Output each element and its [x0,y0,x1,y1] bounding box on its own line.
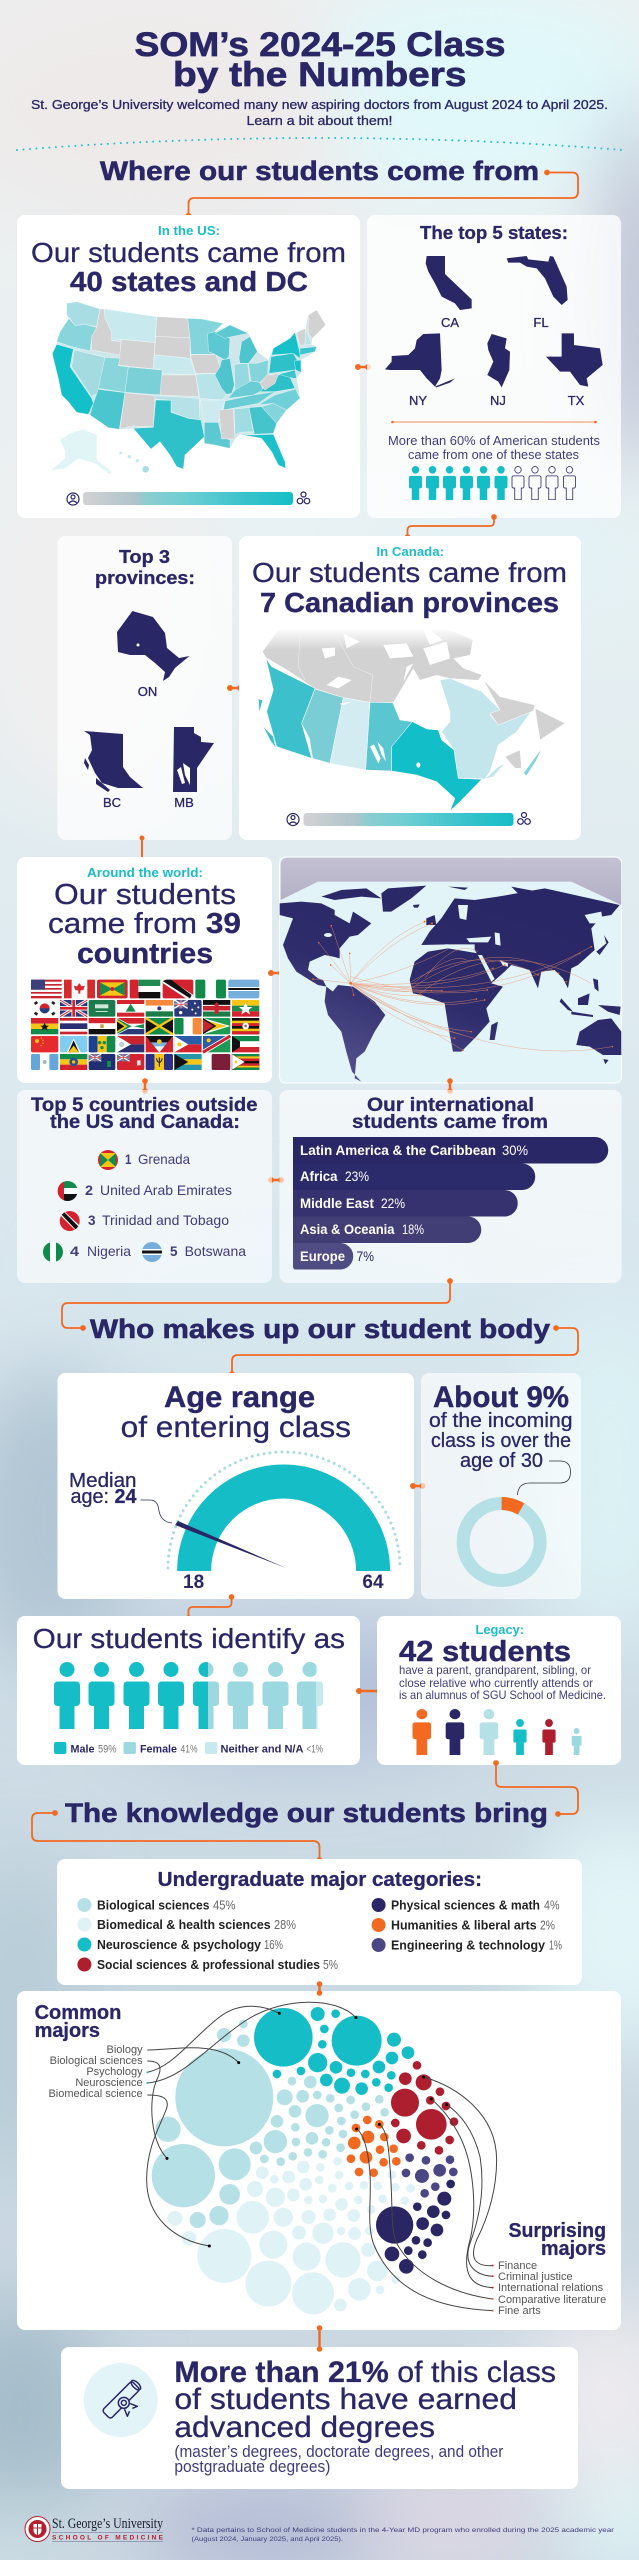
legend: categories: 45% [213,1898,236,1912]
connector [186,1595,234,1620]
connector [410,1484,425,1488]
labels: common majors: Biological sciences [50,2055,143,2067]
connector [32,1811,322,1862]
logo: St. George's University: SCHOOL OF MEDICINE [52,2534,164,2542]
legend: categories: Biomedical & health sciences [97,1917,271,1932]
logo: St. George's University [25,2516,164,2542]
pictogram [54,1662,323,1730]
legend: Female [140,1744,177,1756]
legend: Male [70,1744,94,1756]
title: by the Numbers [173,56,466,94]
text: over age 30: age of 30 [460,1450,543,1472]
gauge labels: 18 [183,1572,204,1593]
heading: age range: Age range [164,1381,315,1414]
text: 60 percent: came from one of these states [408,447,579,462]
text: legacy description [399,1663,606,1702]
heading: common majors: majors [35,2020,100,2042]
panel: top 3 provinces [58,536,232,840]
connector: provinces to world [140,836,144,861]
province labels: BC [103,795,121,810]
heading: international students [352,1095,548,1133]
rank: UAE: United Arab Emirates [100,1182,232,1198]
heading: the knowledge our students bring: The knowledge our students bring [65,1798,548,1828]
text: over age 30 [429,1410,572,1472]
Canada choropleth map [258,630,565,811]
heading: age range [121,1381,351,1444]
migration arcs [313,922,612,1051]
panel: age range [58,1373,414,1599]
headline: 40 states: Our students came from [31,237,346,268]
legend: Neither and N/A [220,1744,304,1756]
panel: top 5 countries [17,1090,272,1283]
panel: advanced degrees [61,2347,578,2489]
heading: top 5 countries: the US and Canada: [50,1112,240,1133]
panel: undergraduate major categories [57,1859,582,1985]
legend scale [287,812,530,826]
rank: Grenada: Grenada [138,1151,190,1167]
packed bubbles [146,2002,497,2314]
text: legacy description: have a parent, grandparent, sibling, or [399,1663,591,1677]
panel: around the world [17,857,272,1083]
text: over age 30: class is over the [431,1430,571,1452]
label: legacy: Legacy: [476,1622,524,1637]
panel: Canada map [239,536,581,840]
title: SOM’s 2024-25 Class [134,26,506,64]
heading: surprising majors: Surprising [508,2220,606,2242]
bubbles: engineering [402,2153,458,2198]
headline: 7 provinces [252,557,567,618]
connector [317,1982,322,1995]
legend: categories: Engineering & technology [391,1938,546,1952]
state labels: NJ [490,393,506,408]
heading: international students: Our international [367,1095,534,1116]
logo: St. George's University: St. George’s University [52,2516,163,2532]
labels: common majors [48,2044,143,2100]
bar chart: Latin America & the Caribbean [300,1142,496,1158]
connector [268,970,284,976]
heading: common majors [35,2002,121,2042]
text: degree types: (master’s degrees, doctorate degrees, and other [174,2442,504,2461]
text: legacy description: close relative who currently attends or [399,1676,593,1690]
legend: categories: Neuroscience & psychology [97,1937,262,1952]
subtitle: St. George’s University welcomed many new aspiring doctors from August 2024 to April 2025. [31,97,608,112]
bar chart: 23% [345,1168,369,1184]
label: in Canada: In Canada: [376,544,444,559]
icon: diploma [84,2363,158,2437]
headline: 21 percent: advanced degrees [174,2411,435,2444]
headline: 7 provinces: 7 Canadian provinces [260,587,559,618]
labels: surprising majors: Finance [498,2260,537,2272]
connector [186,170,578,218]
bubbles: social sciences [391,2061,458,2155]
bar chart: Middle East [300,1195,374,1211]
rank: Nigeria: 4 [70,1243,79,1259]
continents [280,886,621,1082]
panel: about 9 percent [421,1373,581,1599]
label: in the US: In the US: [158,223,220,238]
connector [494,1761,578,1816]
heading: who makes up our student body: Who makes up our student body [90,1314,550,1344]
legend: categories: 1% [549,1938,562,1952]
legend: categories: 4% [544,1898,560,1912]
heading: surprising majors: majors [541,2238,606,2260]
legend: categories: Social sciences & professional studies [97,1957,320,1972]
legend: categories: Biological sciences [97,1898,210,1912]
rank: Nigeria [43,1242,131,1262]
legend: 41% [180,1744,198,1756]
headline: 40 states: 40 states and DC [70,266,308,297]
legend: categories: 5% [323,1957,338,1972]
heading: age range: of entering class [121,1411,351,1444]
headline: 39 countries: countries [77,938,213,970]
state labels: FL [533,315,549,330]
connector: US to top states [356,364,370,370]
rank: Trinidad and Tobago [59,1211,229,1231]
connectors between world panels [143,1079,452,1182]
labels: common majors: Psychology [86,2066,143,2078]
heading: surprising majors [508,2220,606,2260]
bar chart: 22% [381,1195,405,1211]
province labels: ON [138,684,157,699]
connector [230,1326,578,1376]
connector [356,1688,382,1694]
bar chart: Europe [300,1248,345,1264]
title [134,26,506,94]
heading: identify as: Our students identify as [33,1623,345,1654]
heading: international students: students came from [352,1112,548,1133]
bubbles: biological sciences [152,2020,389,2228]
state labels: CA [441,315,459,330]
bar chart [293,1137,608,1270]
text: degree types [174,2442,504,2476]
gauge labels [183,1572,384,1593]
bar chart: Asia & Oceania [300,1221,395,1237]
province labels [103,684,194,810]
headline: 21 percent [174,2356,556,2444]
connector [317,2326,322,2351]
leader lines [147,2002,497,2311]
province labels: MB [174,795,194,810]
state labels [409,315,585,408]
rank: Trinidad and Tobago: Trinidad and Tobago [102,1212,229,1228]
rank: UAE: 2 [85,1182,93,1198]
heading: common majors: Common [35,2002,121,2024]
headline: 42 students: 42 students [399,1636,571,1668]
headline: 40 states [31,237,346,297]
labels: common majors: Biology [107,2044,143,2056]
text: 60 percent: More than 60% of American students [388,433,600,448]
family pictogram [412,1709,582,1755]
panel: international students bar chart [280,1090,622,1283]
bar chart: 18% [402,1221,424,1237]
bar chart: 30% [502,1142,528,1158]
legend: categories [77,1898,562,1972]
province silhouettes [78,611,214,792]
legend [54,1742,323,1756]
legend: categories: Humanities & liberal arts [391,1918,537,1932]
callout: median age [69,1470,172,1523]
headline: 21 percent: More than 21% of this class [174,2356,556,2389]
subtitle [31,97,608,128]
gauge chart [168,1452,400,1571]
panel: gender identity [17,1616,360,1765]
heading: top 3 provinces: Top 3 [119,547,170,567]
panel: top 5 states [367,215,621,518]
bubbles: biomedical and health sciences [168,2157,415,2314]
rank: Grenada: 1 [125,1151,132,1167]
bar chart: 7% [356,1248,374,1264]
text: degree types: postgraduate degrees) [174,2457,330,2476]
rank: Botswana: Botswana [185,1243,246,1259]
bubbles: humanities [347,2116,401,2177]
rank: Botswana [142,1242,246,1262]
heading: top 3 provinces: provinces: [95,568,195,588]
label: around the world: Around the world: [87,865,203,880]
headline: 39 countries [48,879,241,970]
text: 60 percent [388,433,600,462]
callout: median age: age: 24 [70,1486,137,1508]
heading: top 3 provinces [95,547,195,588]
state labels: NY [409,393,427,408]
leader line [518,1461,570,1495]
text: over age 30: of the incoming [429,1410,572,1432]
rank: Trinidad and Tobago: 3 [88,1212,96,1228]
heading: top 5 states: The top 5 states: [420,223,568,243]
rank: Botswana: 5 [170,1243,178,1259]
bubbles: physical sciences [376,2180,455,2274]
panel: bubble chart [17,1991,621,2330]
heading: undergraduate categories: Undergraduate major categories: [158,1869,482,1891]
heading: top 5 countries [31,1095,258,1133]
legend: categories: 2% [540,1918,555,1932]
footnote: (August 2024, January 2025, and April 2025). [192,2536,343,2543]
US choropleth map [52,302,326,474]
labels: surprising majors: Comparative literature [498,2294,606,2306]
legend: 59% [98,1744,117,1756]
headline: 39 countries: came from 39 [48,908,241,940]
rank: Nigeria: Nigeria [87,1243,131,1259]
legend: categories: Physical sciences & math [391,1898,540,1912]
inland seas [324,905,603,982]
headline: 21 percent: of students have earned [174,2383,517,2416]
legend: categories: 28% [274,1917,296,1932]
headline: 39 countries: Our students [54,879,236,911]
labels: surprising majors [498,2260,606,2317]
legend: <1% [306,1744,323,1756]
labels: common majors: Biomedical science [48,2088,143,2100]
donut chart [463,1504,540,1580]
bar chart: Africa [300,1168,338,1184]
heading: about 9 percent: About 9% [433,1381,569,1414]
connector: world to student body [62,1279,452,1330]
subtitle: Learn a bit about them! [246,113,392,128]
panel: world map [280,857,622,1083]
panel: US map [17,215,360,518]
connector [228,686,242,690]
state labels: TX [568,393,585,408]
callout: median age: Median [69,1470,136,1492]
labels: surprising majors: International relations [498,2282,604,2294]
flag grid [31,980,259,1070]
headline: 7 provinces: Our students came from [252,557,567,588]
labels: surprising majors: Criminal justice [498,2271,573,2283]
labels: surprising majors: Fine arts [498,2305,541,2317]
footnote: * Data pertains to School of Medicine students in the 4-Year MD program who enrolled during the 2025 academic year [192,2527,615,2534]
heading: top 5 countries: Top 5 countries outside [31,1095,258,1116]
legend: categories: 16% [264,1937,283,1952]
icon row: people [409,466,576,500]
legend scale [67,492,310,505]
bubbles: neuroscience and psychology [254,2007,414,2095]
footnote [192,2527,615,2543]
panel: legacy [377,1616,621,1765]
connector: states to Canada [406,515,496,539]
state silhouettes [385,256,603,387]
text: legacy description: is an alumnus of SGU School of Medicine. [399,1688,606,1702]
labels: common majors: Neuroscience [75,2077,143,2089]
rank: Grenada [98,1150,190,1170]
heading: where our students come from: Where our students come from [100,156,539,186]
rank: UAE [57,1181,232,1201]
gauge labels: 64 [362,1572,384,1593]
